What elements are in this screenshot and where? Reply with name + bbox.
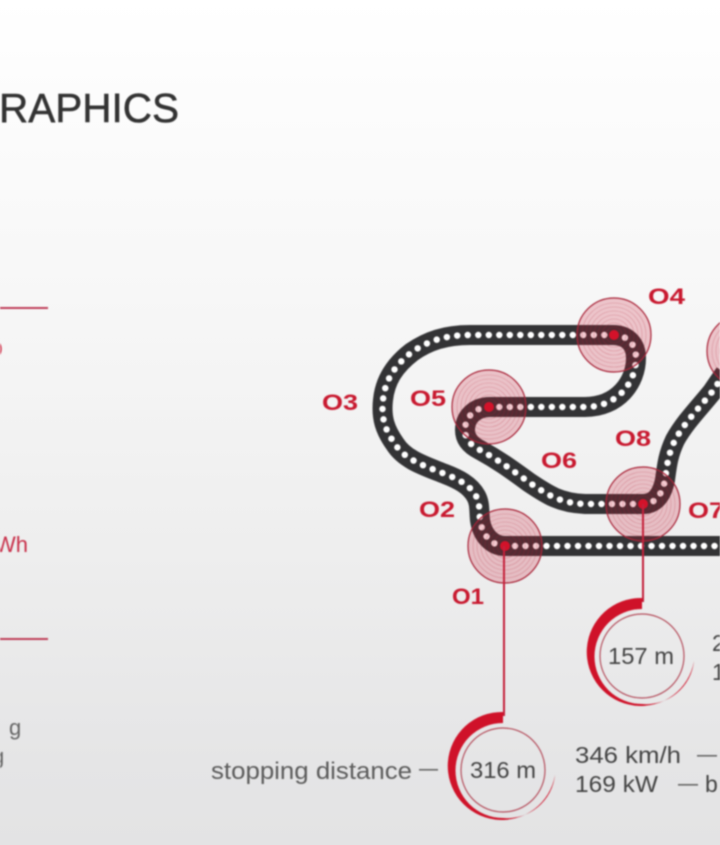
spec text fragments — [0, 715, 21, 769]
stats: 169 kW: 169 kW — [575, 771, 658, 797]
stats: 169 kW — [575, 771, 718, 797]
corner numbers: O3 — [322, 390, 358, 415]
corner numbers: O7 — [688, 498, 720, 523]
stats: 346 km/h: 346 km/h — [575, 742, 681, 768]
corner numbers: O6 — [541, 448, 577, 473]
corner numbers: O8 — [615, 426, 651, 451]
stats: top dial fragments — [712, 630, 720, 685]
dial: 157 m — [587, 598, 694, 706]
corner numbers: O1 — [452, 584, 484, 609]
title: RAPHICS — [0, 85, 179, 131]
corner numbers: O2 — [419, 497, 455, 522]
corner numbers: O5 — [410, 386, 446, 411]
racetrack — [382, 335, 720, 546]
dial: 316 m: 316 m — [470, 757, 536, 783]
corner numbers — [322, 284, 720, 609]
spec text fragments: g — [9, 715, 21, 740]
braking zone: corner 08 — [606, 467, 680, 541]
braking zone: right edge corner — [707, 314, 720, 388]
divider line: upper — [0, 307, 48, 309]
connector: corner 08 to dial — [642, 504, 644, 602]
braking zone: corner 04 — [577, 298, 651, 372]
braking zone: corner 01 — [468, 509, 542, 583]
dial: 316 m — [448, 712, 555, 820]
divider line: lower — [0, 638, 48, 640]
dial: 157 m: 157 m — [608, 643, 674, 669]
connector: corner 01 to dial — [503, 546, 505, 716]
braking zone: corner 05 — [452, 370, 526, 444]
corner numbers: O4 — [648, 284, 686, 309]
partial ring marker at left edge — [0, 339, 1, 359]
label: stopping distance: stopping distance — [211, 758, 412, 785]
stats: 169 kW: b — [705, 771, 718, 797]
